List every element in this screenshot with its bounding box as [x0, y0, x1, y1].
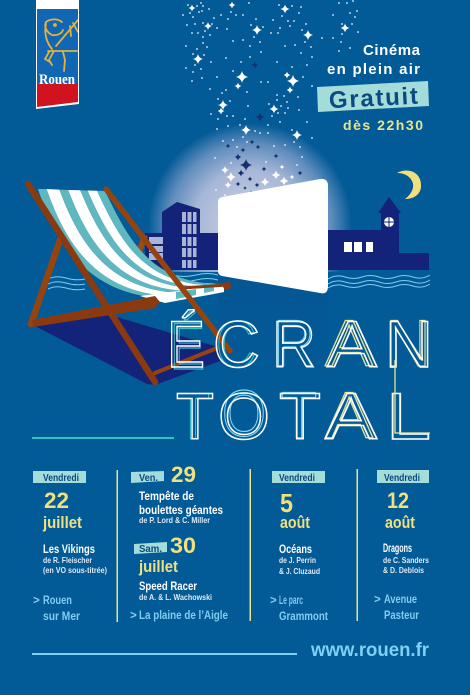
- venue: Rouen: [43, 595, 72, 607]
- logo: Rouen banner: [36, 0, 79, 109]
- venue: [33, 595, 80, 623]
- right rail: [106, 189, 230, 351]
- venue: Avenue: [384, 594, 417, 606]
- back leg: [31, 240, 60, 324]
- heading accent: yellow line of the L: [395, 360, 430, 433]
- heading: ÉCRAN: C: [216, 307, 256, 381]
- film: Les Vikings: [43, 544, 95, 556]
- date: 30 juillet: juillet: [138, 557, 178, 576]
- front foot bar: [32, 296, 160, 327]
- film: Océans: [279, 544, 312, 556]
- tagline block: [317, 42, 429, 133]
- venue: >: [130, 610, 137, 622]
- heading: TOTAL: O: [222, 376, 266, 450]
- film: de R. Fleischer: [43, 555, 93, 565]
- day tag: [377, 470, 429, 484]
- day tag: [272, 471, 325, 484]
- building: left block: [145, 202, 218, 270]
- footer url: www.rouen.fr: [310, 640, 430, 661]
- programme column: 29 and 30 juillet: [130, 462, 228, 622]
- badge: Gratuit: Gratuit: [328, 83, 419, 114]
- accent line left of TOTAL: [32, 437, 174, 439]
- day tag: Ven.: Ven.: [139, 473, 158, 484]
- heading: ÉCRAN: R: [272, 307, 316, 381]
- film: [279, 544, 320, 576]
- building: right church hall: [328, 197, 429, 270]
- film: Speed Racer: Speed Racer: [139, 581, 197, 593]
- date: juillet: [42, 513, 82, 532]
- heading: ÉCRAN: N: [386, 306, 430, 380]
- date: août: [280, 513, 310, 532]
- programme column: 22 juillet: [33, 471, 107, 623]
- large white stars: [188, 2, 350, 188]
- film: Tempête de boulettes géantes: boulettes géantes: [139, 505, 223, 517]
- small white star dots: [183, 1, 358, 195]
- film: (en VO sous-titrée): [43, 565, 107, 575]
- programme column: 5 août: [270, 471, 328, 623]
- moon: [397, 171, 421, 199]
- date: 29: 29: [171, 462, 196, 487]
- deckchair: [28, 184, 231, 382]
- date: [42, 488, 82, 532]
- striped canvas: [38, 189, 224, 303]
- rear strut: [138, 235, 145, 255]
- film: Speed Racer: de A. & L. Wachowski: [139, 592, 212, 602]
- venue: >: [374, 594, 381, 606]
- day tag: Vendredi: [43, 473, 79, 484]
- date: 22: [44, 488, 69, 513]
- text: start time: dès 22h30: [343, 117, 423, 133]
- heading: TOTAL: [176, 376, 431, 453]
- film: [383, 543, 429, 575]
- heading: TOTAL: T: [281, 378, 317, 452]
- date: [385, 488, 415, 532]
- footer rule: [32, 653, 297, 655]
- starfield rising from the screen: [183, 1, 358, 200]
- heading: TOTAL: T: [279, 379, 321, 453]
- film: & D. Deblois: [383, 565, 424, 575]
- date: 30 juillet: 30: [170, 533, 196, 558]
- film: Dragons: [383, 543, 412, 555]
- screen reflection on ground: [218, 272, 328, 372]
- heading: ÉCRAN: R: [274, 306, 314, 380]
- heading: ÉCRAN: [167, 306, 433, 383]
- heading: ÉCRAN: C: [213, 307, 260, 381]
- film: Tempête de boulettes géantes: [139, 491, 223, 525]
- heading: ÉCRAN: N: [385, 307, 433, 381]
- heading: TOTAL: T: [176, 379, 214, 453]
- text: Cinéma en plein air: en plein air: [327, 61, 420, 78]
- text: Cinéma en plein air: [327, 42, 421, 78]
- date: 30 juillet: [138, 533, 196, 576]
- dark navy stars: [226, 62, 302, 200]
- film: Tempête de boulettes géantes: Tempête de: [139, 491, 194, 503]
- heading: TOTAL: O: [218, 379, 270, 453]
- venue: sur Mer: [43, 611, 80, 623]
- heading: ÉCRAN: É: [170, 309, 205, 383]
- date: 5: [280, 488, 293, 518]
- day tag: Sam.: Sam.: [139, 544, 162, 555]
- day tag: Sam.: [134, 542, 167, 555]
- date: août: [385, 513, 415, 532]
- film: de J. Perrin: [279, 555, 316, 565]
- cinema screen: [218, 179, 328, 293]
- film: & J. Cluzaud: [279, 566, 320, 576]
- venue: Pasteur: [384, 610, 419, 622]
- day tag: [33, 471, 86, 484]
- lower cross rail: [155, 348, 217, 373]
- venue: La plaine de l’Aigle: [139, 610, 228, 622]
- venue: Le parc: [279, 595, 303, 607]
- day tag: Ven.: [131, 471, 164, 484]
- date: 12: [387, 488, 409, 513]
- heading: ÉCRAN: A: [325, 306, 373, 380]
- film: de C. Sanders: [383, 555, 429, 565]
- day tag: Vendredi: [384, 473, 420, 484]
- film: Speed Racer: [139, 581, 212, 602]
- venue: [374, 594, 419, 622]
- venue: [270, 595, 328, 623]
- venue: Grammont: [279, 611, 328, 623]
- day tag: Vendredi: [279, 473, 315, 484]
- text: Cinéma en plein air: Cinéma: [363, 42, 421, 59]
- deckchair shadow: [33, 315, 223, 385]
- date: [280, 488, 310, 532]
- programme column: 12 août: [374, 470, 429, 622]
- water waves: [48, 274, 430, 290]
- logo wordmark: Rouen: [39, 72, 76, 88]
- heading: TOTAL: A: [325, 379, 377, 453]
- projector light glow: [150, 125, 350, 272]
- venue: >: [270, 595, 277, 607]
- heading: TOTAL: L: [386, 379, 431, 453]
- film: [43, 544, 107, 575]
- venue: >: [33, 595, 40, 607]
- seat end bar: [182, 285, 227, 288]
- film: Tempête de boulettes géantes: de P. Lord & C. Miller: [139, 515, 211, 525]
- heading: TOTAL: A: [325, 378, 373, 452]
- heading: ÉCRAN: É: [167, 307, 205, 381]
- left rail: [28, 184, 155, 382]
- heading: ÉCRAN: A: [327, 307, 377, 381]
- icon: golden lamb with quill: [45, 19, 78, 71]
- heading: TOTAL: T: [176, 379, 210, 453]
